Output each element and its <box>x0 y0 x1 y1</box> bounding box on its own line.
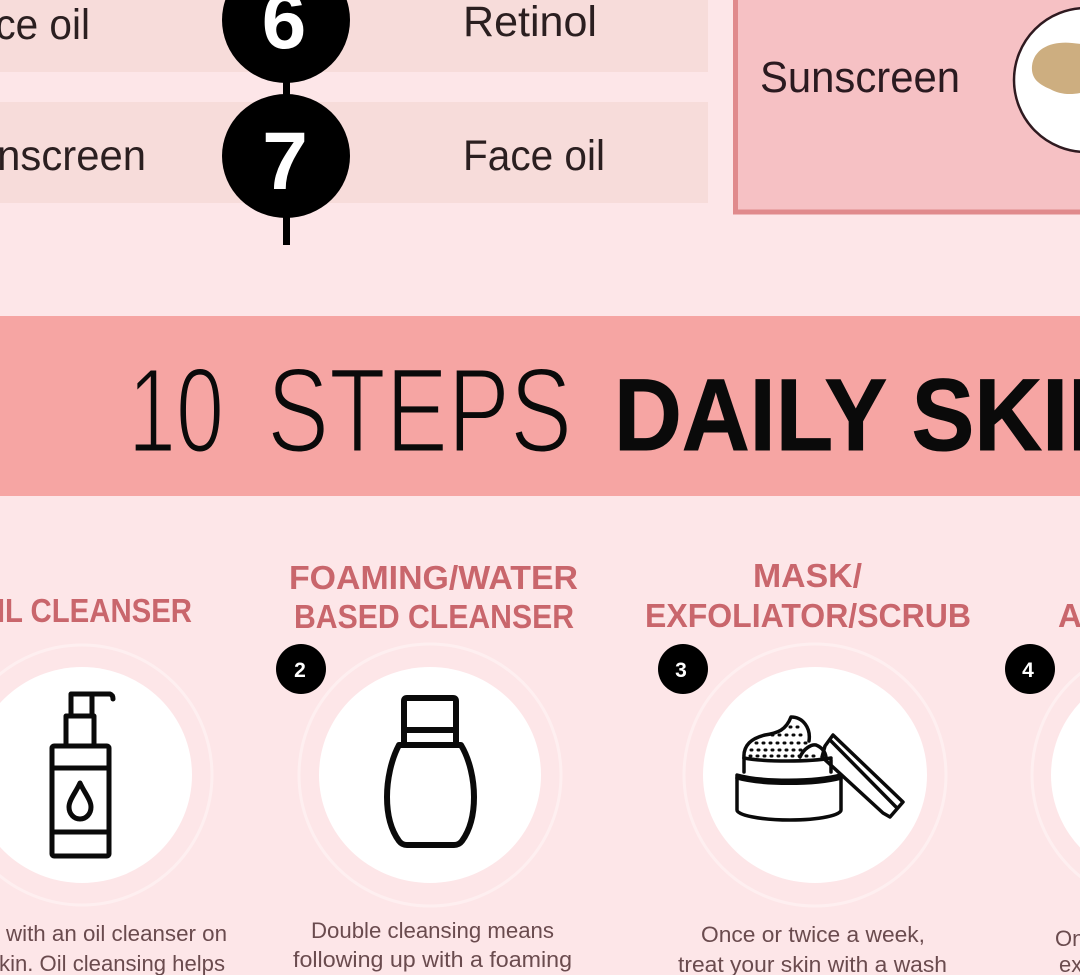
step 3: mask, exfoliator or scrub <box>645 557 971 975</box>
icon: bottle <box>387 698 474 845</box>
description: Double cleansing means <box>311 918 554 943</box>
icon: open scrub jar <box>737 717 903 820</box>
icon circle <box>1032 644 1080 906</box>
icon: pump bottle with oil drop <box>52 694 113 856</box>
heading: FOAMING/WATER <box>289 559 578 596</box>
description: following up with a foaming <box>293 947 572 972</box>
heading: EXFOLIATOR/SCRUB <box>645 597 971 634</box>
step 2: foaming or water based cleanser <box>276 559 578 972</box>
number badge 4 <box>1005 644 1055 694</box>
number badge 2 <box>276 644 326 694</box>
timeline with numbered steps 6 and 7: 7 <box>262 116 308 207</box>
comparison row: step 6 <box>0 0 708 72</box>
description: Once or twice a week, <box>701 922 925 947</box>
number badge 3 <box>658 644 708 694</box>
description <box>293 918 572 972</box>
title banner: STEPS <box>267 342 572 478</box>
step 1: oil cleanser <box>0 592 227 975</box>
description: with an oil cleanser on <box>5 921 227 946</box>
description <box>678 922 947 975</box>
panel: sunscreen: Sunscreen <box>760 53 960 102</box>
icon circle <box>299 644 561 906</box>
title banner: 10 <box>128 342 224 478</box>
step 4: partially visible <box>1005 597 1080 975</box>
number badge 3: 3 <box>675 659 687 682</box>
heading <box>645 557 971 634</box>
heading: MASK/ <box>753 557 862 594</box>
title banner <box>0 316 1080 496</box>
heading <box>289 559 578 635</box>
heading: BASED CLEANSER <box>294 598 574 635</box>
icon circle <box>684 644 946 906</box>
number badge 2: 2 <box>294 659 306 682</box>
panel: sunscreen <box>736 0 1080 212</box>
comparison row: step 7: Face oil <box>463 132 605 180</box>
description <box>1055 926 1080 975</box>
timeline with numbered steps 6 and 7 <box>222 0 350 245</box>
description <box>0 921 227 975</box>
comparison row: step 7 <box>0 102 708 203</box>
number badge 4: 4 <box>1022 659 1034 682</box>
icon circle <box>0 645 212 905</box>
